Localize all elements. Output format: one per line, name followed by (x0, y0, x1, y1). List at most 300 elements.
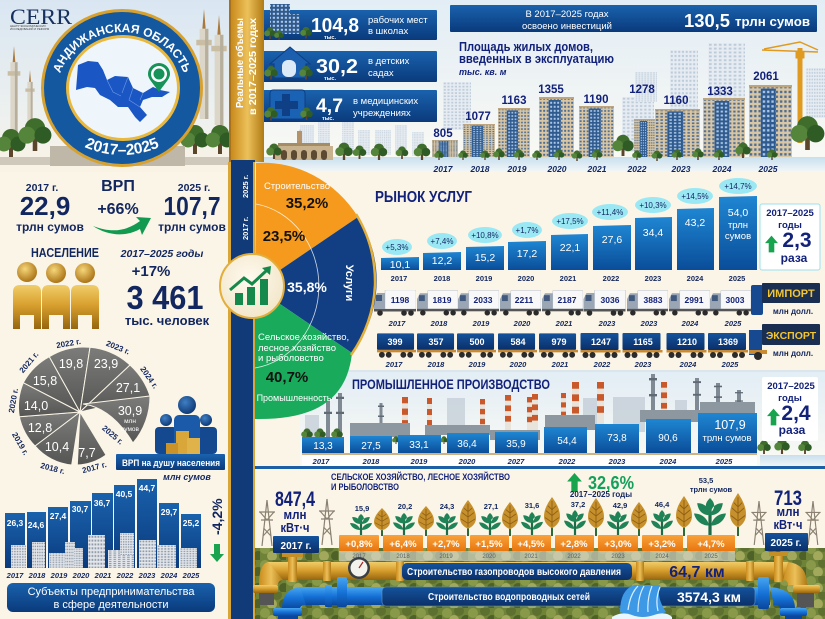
chart: GDP structure fan: и рыболовство (258, 353, 324, 364)
chart: business entities: 44,7 (139, 483, 156, 493)
chart: agriculture: +4,7% (697, 539, 725, 550)
chart: industrial production: 36,4 (457, 439, 477, 450)
chart: services market: 15,2 (475, 252, 495, 264)
growth bubbles: +14,7% (724, 182, 752, 191)
sector: agriculture and industry (255, 287, 352, 419)
card: medical: в медицинских (353, 96, 418, 107)
chart: agriculture: +4,5% (517, 539, 545, 550)
label: gas pipeline: Строительство газопроводов высокого давления (407, 567, 621, 578)
callout: industry growth: 2,4 (781, 402, 811, 425)
chart: exports: 584 (510, 337, 526, 347)
logo: CERR: ИССЛЕДОВАНИЙ И РЕФОРМ (10, 27, 50, 31)
chart: business entities: 2025 (182, 571, 200, 580)
panel: GRP (16, 178, 226, 235)
label: imports: млн долл. (773, 307, 813, 316)
chart: industrial production: 2018 (362, 457, 380, 466)
label: water network: Строительство водопроводных сетей (428, 592, 590, 603)
chart: services market: 2024 (687, 274, 704, 283)
chart: GDP structure fan (220, 163, 377, 419)
chart: imports: 2211 (515, 295, 533, 305)
chart: exports: 2024 (679, 360, 697, 369)
icon: house (264, 47, 313, 80)
growth bubbles: +7,4% (431, 237, 453, 246)
map of Uzbekistan (76, 61, 170, 122)
chart: exports: 979 (551, 337, 567, 347)
callout: industry growth: 2017–2025 (767, 381, 815, 392)
icon: waterfall (612, 585, 672, 619)
panel: GRP: +66% (97, 201, 139, 218)
growth bubbles: +5,3% (386, 243, 408, 252)
label: water network (382, 587, 755, 606)
chart: services market: 2025 (729, 274, 745, 283)
callout: investments (450, 5, 817, 32)
chart: services market: 34,4 (643, 227, 663, 239)
icon: medical cross (264, 90, 313, 120)
growth bubbles: +11,4% (597, 208, 623, 217)
pylons (259, 499, 821, 546)
callout: electricity 2025: 2025 г. (771, 538, 802, 549)
chart: business entities: 27,4 (50, 511, 67, 521)
chart: GDP structure fan: Промышленность (257, 393, 332, 403)
chart: agriculture: 24,3 (440, 502, 454, 511)
card: medical: тыс. (322, 116, 334, 122)
chart: business entities: 2022 (116, 571, 134, 580)
panel: GRP: 22,9 (20, 191, 70, 221)
icon: gold people (13, 262, 99, 329)
chart: GDP structure fan: 2017 г. (241, 217, 250, 240)
chart: industrial production: 2027 (507, 457, 525, 466)
chart: services market: 2020 (518, 274, 534, 283)
chart: imports: 1198 (391, 295, 409, 305)
label: exports: млн долл. (773, 349, 813, 358)
label: GRP per capita: ВРП на душу населения (122, 458, 220, 469)
chart: services market: 2017 (391, 274, 407, 283)
chart: GRP per capita pie: 27,1 (116, 381, 140, 395)
label: business entities (7, 583, 215, 612)
panel: GRP: ВРП (101, 178, 135, 195)
icon: blue people with coins (155, 396, 217, 454)
chart: GRP per capita pie: 2019 г. (10, 431, 30, 457)
chart: exports: 1369 (718, 337, 738, 347)
chart: industrial production: трлн сумов (702, 433, 752, 444)
chart: industrial production (302, 413, 757, 467)
chart: business entities: 30,7 (72, 504, 89, 514)
callout: investments: освоено инвестиций (522, 21, 612, 32)
callout: electricity 2025 (765, 487, 808, 551)
chart: services market: 2019 (476, 274, 492, 283)
chart: housing area: 1355 (538, 84, 564, 96)
chart: housing area (432, 71, 792, 157)
chart: exports: 2023 (634, 360, 652, 369)
callout: services growth: раза (781, 251, 808, 265)
chart: GRP per capita pie: 2025 г. (100, 424, 125, 446)
emblem ring (41, 9, 203, 167)
heading: housing: тыс. кв. м (459, 67, 507, 77)
chart: agriculture: +6,4% (389, 539, 417, 550)
card: kindergartens: в детских (368, 56, 410, 67)
callout: agriculture growth (567, 473, 634, 499)
chart: industrial production: 2022 (558, 457, 576, 466)
left column band (230, 160, 255, 619)
chart: agriculture: +0,8% (345, 539, 373, 550)
chart: agriculture: 37,2 (571, 500, 585, 509)
emblem years: 2017–2025 (84, 138, 158, 155)
chart: housing area: 1333 (707, 86, 733, 98)
panel: real volumes band: в 2017–2025 годах (247, 18, 259, 115)
chart: industrial production: 2017 (312, 457, 330, 466)
pipe: gas (253, 552, 820, 607)
card: schools: 104,8 (311, 15, 359, 37)
chart: exports: 2018 (427, 360, 445, 369)
card: kindergartens (263, 47, 437, 82)
chart: agriculture: 2022 (567, 554, 581, 560)
growth bubbles: +1,7% (516, 226, 538, 235)
chart: business entities: 29,7 (161, 507, 178, 517)
chart: agriculture: 2017 (352, 554, 366, 560)
callout: investments: В 2017–2025 годах (525, 9, 609, 20)
chart: GRP per capita pie: 7,7 (78, 446, 96, 460)
chart: services market: 2023 (645, 274, 661, 283)
chart: exports: 399 (387, 337, 403, 347)
chart: services market: сумов (725, 231, 751, 242)
callout: electricity 2017 (273, 488, 319, 553)
chart: imports: 2017 (388, 319, 406, 328)
chart: agriculture: 2019 (439, 554, 453, 560)
chart: business entities: 2020 (72, 571, 90, 580)
chart: GRP per capita pie: 12,8 (28, 421, 52, 435)
chart: GRP per capita pie: 14,0 (24, 399, 48, 413)
chart: imports: 2023 (640, 319, 658, 328)
chart: GDP structure fan: Строительство (264, 181, 330, 192)
chart: services market: 27,6 (602, 234, 622, 246)
chart: GRP per capita pie: 2018 г. (40, 461, 66, 476)
chart: agriculture: +3,2% (648, 539, 676, 550)
label: imports (762, 283, 820, 316)
card: schools: тыс. (324, 35, 336, 41)
logo: CERR: ЦЕНТР ЭКОНОМИЧЕСКИХ (10, 24, 46, 28)
chart: agriculture: +3,0% (604, 539, 632, 550)
panel: population (13, 246, 210, 329)
chart: agriculture: 46,4 (655, 500, 670, 509)
callout: electricity 2025: 713 (774, 487, 802, 510)
chart: industrial production: 2025 (715, 457, 733, 466)
label: gas pipeline (402, 563, 632, 580)
axis: housing years: 2022 (627, 164, 647, 174)
chart: exports: 2017 (385, 360, 403, 369)
chart: services market: 12,2 (432, 255, 452, 267)
chart: GRP per capita pie: 2017 г. (81, 460, 107, 475)
chart: agriculture: 2025 (704, 554, 718, 560)
chart: services market: 10,1 (390, 259, 410, 271)
callout: agriculture growth: 2017–2025 годы (570, 490, 632, 499)
chart: business entities: 2018 (28, 571, 46, 580)
panel: real volumes band: Реальные объемы (234, 18, 246, 108)
chart: business entities: 24,6 (28, 520, 45, 530)
chart: exports: 2025 (721, 360, 739, 369)
chart: exports: 2022 (593, 360, 611, 369)
change: -4,2% (209, 498, 225, 562)
callout: investments: 130,5 (684, 11, 730, 31)
panel: real volumes band (231, 0, 264, 162)
label: GRP per capita: млн сумов (163, 472, 211, 482)
chart: agriculture: 31,6 (525, 501, 539, 510)
axis: housing years: 2023 (671, 164, 691, 174)
callout: electricity 2025: кВт·ч (774, 518, 802, 532)
chart: exports: 2021 (551, 360, 568, 369)
chart: industrial production: 107,9 (714, 418, 746, 432)
chart: GRP per capita pie (7, 337, 160, 476)
label: imports: ИМПОРТ (767, 288, 815, 300)
chart: imports: 2020 (513, 319, 531, 328)
chart: imports: 2021 (555, 319, 572, 328)
chart: services market: 54,0 (728, 207, 748, 219)
chart: GDP structure fan: Услуги (343, 265, 355, 301)
chart: services market: трлн (728, 220, 748, 231)
chart: services market: 2022 (603, 274, 619, 283)
card: kindergartens: 30,2 (316, 56, 358, 78)
chart: imports: 2024 (681, 319, 699, 328)
panel: industry background (255, 370, 825, 467)
chart: industrial production: 90,6 (658, 433, 678, 444)
chart: GRP per capita pie: 2022 г. (56, 337, 82, 350)
growth bubbles (382, 178, 757, 255)
chart: business entities: 25,2 (183, 518, 200, 528)
trees: housing row (266, 116, 824, 161)
chart: imports: 2025 (724, 319, 742, 328)
chart: GRP per capita pie: 30,9 (118, 404, 142, 418)
axis: housing years: 2024 (712, 164, 732, 174)
chart: agriculture: 15,9 (355, 504, 369, 513)
chart: housing area: 805 (433, 128, 453, 140)
chart: business entities: 26,3 (7, 518, 24, 528)
chart: imports: 3036 (601, 295, 620, 305)
chart: services market (381, 178, 757, 283)
label: exports (762, 324, 820, 358)
icon: school building (264, 4, 312, 40)
chart: agriculture: 27,1 (484, 502, 498, 511)
map pin (148, 63, 170, 92)
axis: housing years: 2019 (507, 164, 527, 174)
heading: industry: ПРОМЫШЛЕННОЕ ПРОИЗВОДСТВО (352, 376, 550, 392)
chart: GDP structure fan: 2025 г. (241, 175, 250, 198)
chart: industrial production: 2023 (608, 457, 626, 466)
chart: imports: 2023 (598, 319, 616, 328)
chart: imports: 3883 (644, 295, 663, 305)
chart: GDP structure fan: 40,7% (266, 369, 308, 386)
card: schools: в школах (368, 26, 408, 37)
chart: agriculture: 2020 (482, 554, 496, 560)
callout: electricity 2025: млн (776, 505, 800, 519)
callout: investments: трлн сумов (735, 14, 810, 29)
sector: services (255, 217, 377, 353)
chart: industrial production: 54,4 (557, 436, 577, 447)
chart: business entities: 2017 (6, 571, 24, 580)
chart: imports (374, 285, 763, 328)
card: schools (263, 4, 437, 41)
card: medical (263, 90, 437, 122)
callout: services growth: 2,3 (782, 229, 812, 252)
chart: imports: 1819 (433, 295, 452, 305)
chart: exports: 357 (428, 337, 444, 347)
panel: housing skyline background (255, 0, 825, 172)
emblem title: АНДИЖАНСКАЯ ОБЛАСТЬ (54, 24, 189, 74)
axis: housing years: 2018 (470, 164, 490, 174)
arrow: growth (93, 217, 151, 235)
chart: agriculture: 20,2 (398, 502, 412, 511)
chart: business entities: 2019 (50, 571, 68, 580)
chart: imports: 2991 (685, 295, 704, 305)
chart: business entities: 2023 (138, 571, 156, 580)
chart: services market: 43,2 (685, 217, 705, 229)
chart: GRP per capita pie: 10,4 (45, 440, 69, 454)
chart: imports: 2187 (558, 295, 577, 305)
panel: GRP: 107,7 (164, 191, 220, 221)
label: exports: ЭКСПОРТ (766, 330, 817, 342)
chart: GRP per capita pie: 2023 г. (105, 339, 131, 356)
chart: exports: 2020 (509, 360, 527, 369)
callout: industry growth: раза (779, 423, 806, 437)
card: schools: рабочих мест (368, 15, 428, 26)
callout: electricity 2017: 2017 г. (281, 541, 312, 552)
chart: services market: 22,1 (560, 242, 580, 254)
value: water network length: 3574,3 км (677, 589, 741, 605)
heading: agriculture (331, 471, 510, 492)
heading: housing (459, 40, 614, 77)
heading: housing: Площадь жилых домов, (459, 40, 593, 54)
chart: housing area: 1160 (664, 95, 688, 107)
chart: housing area: 1077 (465, 111, 491, 123)
axis: housing years (433, 164, 778, 174)
logo: CERR: CERR (10, 4, 72, 29)
chart: housing area: 1190 (584, 94, 608, 106)
growth bubbles: +10,3% (639, 201, 667, 210)
panel: GRP: трлн сумов (158, 220, 226, 234)
chart: GRP per capita pie: 2020 г. (7, 388, 20, 414)
axis: housing years: 2017 (433, 164, 454, 174)
callout: industry growth: годы (778, 393, 802, 404)
chart: business entities (5, 479, 225, 580)
chart: industrial production: 2020 (458, 457, 476, 466)
chart: agriculture: +2,8% (560, 539, 588, 550)
panel: population: +17% (132, 263, 170, 280)
label: business entities: в сфере деятельности (53, 599, 169, 611)
icon: pressure gauge (348, 557, 370, 579)
card: medical: учреждениях (353, 108, 411, 119)
growth bubbles: +17,5% (556, 217, 584, 226)
chart: GRP per capita pie: сумов (121, 426, 140, 433)
chart: housing area: 1278 (629, 84, 655, 96)
panel: population: 2017–2025 годы (120, 248, 203, 260)
chart: industrial production: 2019 (410, 457, 428, 466)
chart: GRP per capita pie: 19,8 (59, 357, 83, 371)
chart: GDP structure fan: лесное хозяйство (258, 343, 336, 354)
panel: GRP: 2025 г. (178, 182, 210, 194)
card: kindergartens: тыс. (324, 76, 336, 82)
building: classical palace (275, 129, 333, 160)
chart: services market: 2018 (434, 274, 450, 283)
axis: housing years: 2020 (547, 164, 567, 174)
callout: electricity 2017: млн (284, 508, 306, 522)
chart: agriculture: трлн сумов (690, 485, 733, 494)
chart: GDP structure fan: 23,5% (263, 228, 305, 245)
heading: services: РЫНОК УСЛУГ (375, 189, 472, 206)
change: -4,2%: -4,2% (209, 498, 225, 535)
chart: exports: 500 (469, 337, 485, 347)
chart: GRP per capita pie: млн (124, 418, 136, 425)
chart: imports: 2033 (474, 295, 493, 305)
callout: services growth: 2017–2025 (766, 208, 814, 219)
chart: agriculture: 2024 (655, 554, 669, 560)
card: medical: 4,7 (316, 96, 343, 117)
panel: population: тыс. человек (125, 313, 210, 328)
heading: housing: введенных в эксплуатацию (459, 52, 614, 66)
icon: growth chart medallion (220, 254, 284, 318)
label: GRP per capita (116, 454, 225, 482)
chart: services market: 2021 (560, 274, 576, 283)
growth bubbles: +14,5% (681, 192, 709, 201)
chart: industrial production: 2024 (659, 457, 677, 466)
sector: construction (255, 163, 358, 287)
chart: industrial production: 13,3 (313, 441, 333, 452)
callout: agriculture growth: 32,6% (588, 473, 634, 493)
chart: agriculture: 53,5 (699, 476, 713, 485)
chart: business entities: 2021 (94, 571, 111, 580)
panel: GRP: трлн сумов (16, 220, 84, 234)
callout: electricity 2017: 847,4 (275, 488, 315, 511)
chart: housing area: 1163 (502, 95, 526, 107)
chart: housing area: 2061 (753, 71, 779, 83)
chart: business entities: 2024 (160, 571, 178, 580)
panel: region emblem (0, 0, 229, 167)
chart: exports (377, 330, 767, 369)
chart: industrial production: 73,8 (607, 433, 627, 444)
heading: agriculture: СЕЛЬСКОЕ ХОЗЯЙСТВО, ЛЕСНОЕ ХОЗЯЙСТВО (331, 471, 510, 482)
chart: industrial production: 33,1 (409, 440, 429, 451)
chart: GRP per capita pie: 23,9 (94, 357, 118, 371)
chart: imports: 2018 (430, 319, 448, 328)
chart: GRP per capita pie: 2024 г. (138, 365, 160, 390)
crane (762, 42, 818, 143)
chart: business entities: 36,7 (94, 498, 111, 508)
axis: housing years: 2021 (587, 164, 607, 174)
chart: industrial production: 27,5 (361, 441, 381, 452)
panel: shrub background (255, 548, 825, 619)
chart: agriculture (339, 476, 746, 561)
growth bubbles: +10,8% (471, 231, 499, 240)
label: business entities: Субъекты предпринимательства (28, 586, 195, 598)
chart: agriculture: 42,9 (613, 501, 627, 510)
chart: GDP structure fan: 35,8% (287, 279, 327, 295)
chart: agriculture: 2023 (611, 554, 625, 560)
panel: GRP: 2017 г. (26, 182, 58, 194)
card: kindergartens: садах (368, 68, 394, 79)
panel: population: НАСЕЛЕНИЕ (31, 246, 99, 260)
chart: agriculture: +1,5% (475, 539, 503, 550)
chart: GDP structure fan: 35,2% (286, 195, 328, 212)
callout: electricity 2017: кВт·ч (280, 521, 310, 535)
chart: exports: 1247 (591, 337, 611, 347)
chart: agriculture: +2,7% (432, 539, 460, 550)
chart: exports: 1210 (677, 337, 697, 347)
chart: agriculture: 2021 (524, 554, 538, 560)
chart: GRP per capita pie: 15,8 (33, 374, 57, 388)
value: gas pipeline length: 64,7 км (669, 564, 725, 581)
callout: services growth: годы (778, 220, 802, 231)
chart: imports: 3003 (726, 295, 745, 305)
chart: business entities: 40,5 (116, 489, 133, 499)
chart: GRP per capita pie: 2021 г. (18, 350, 40, 375)
chart: GDP structure fan: Сельское хозяйство, (258, 332, 349, 343)
